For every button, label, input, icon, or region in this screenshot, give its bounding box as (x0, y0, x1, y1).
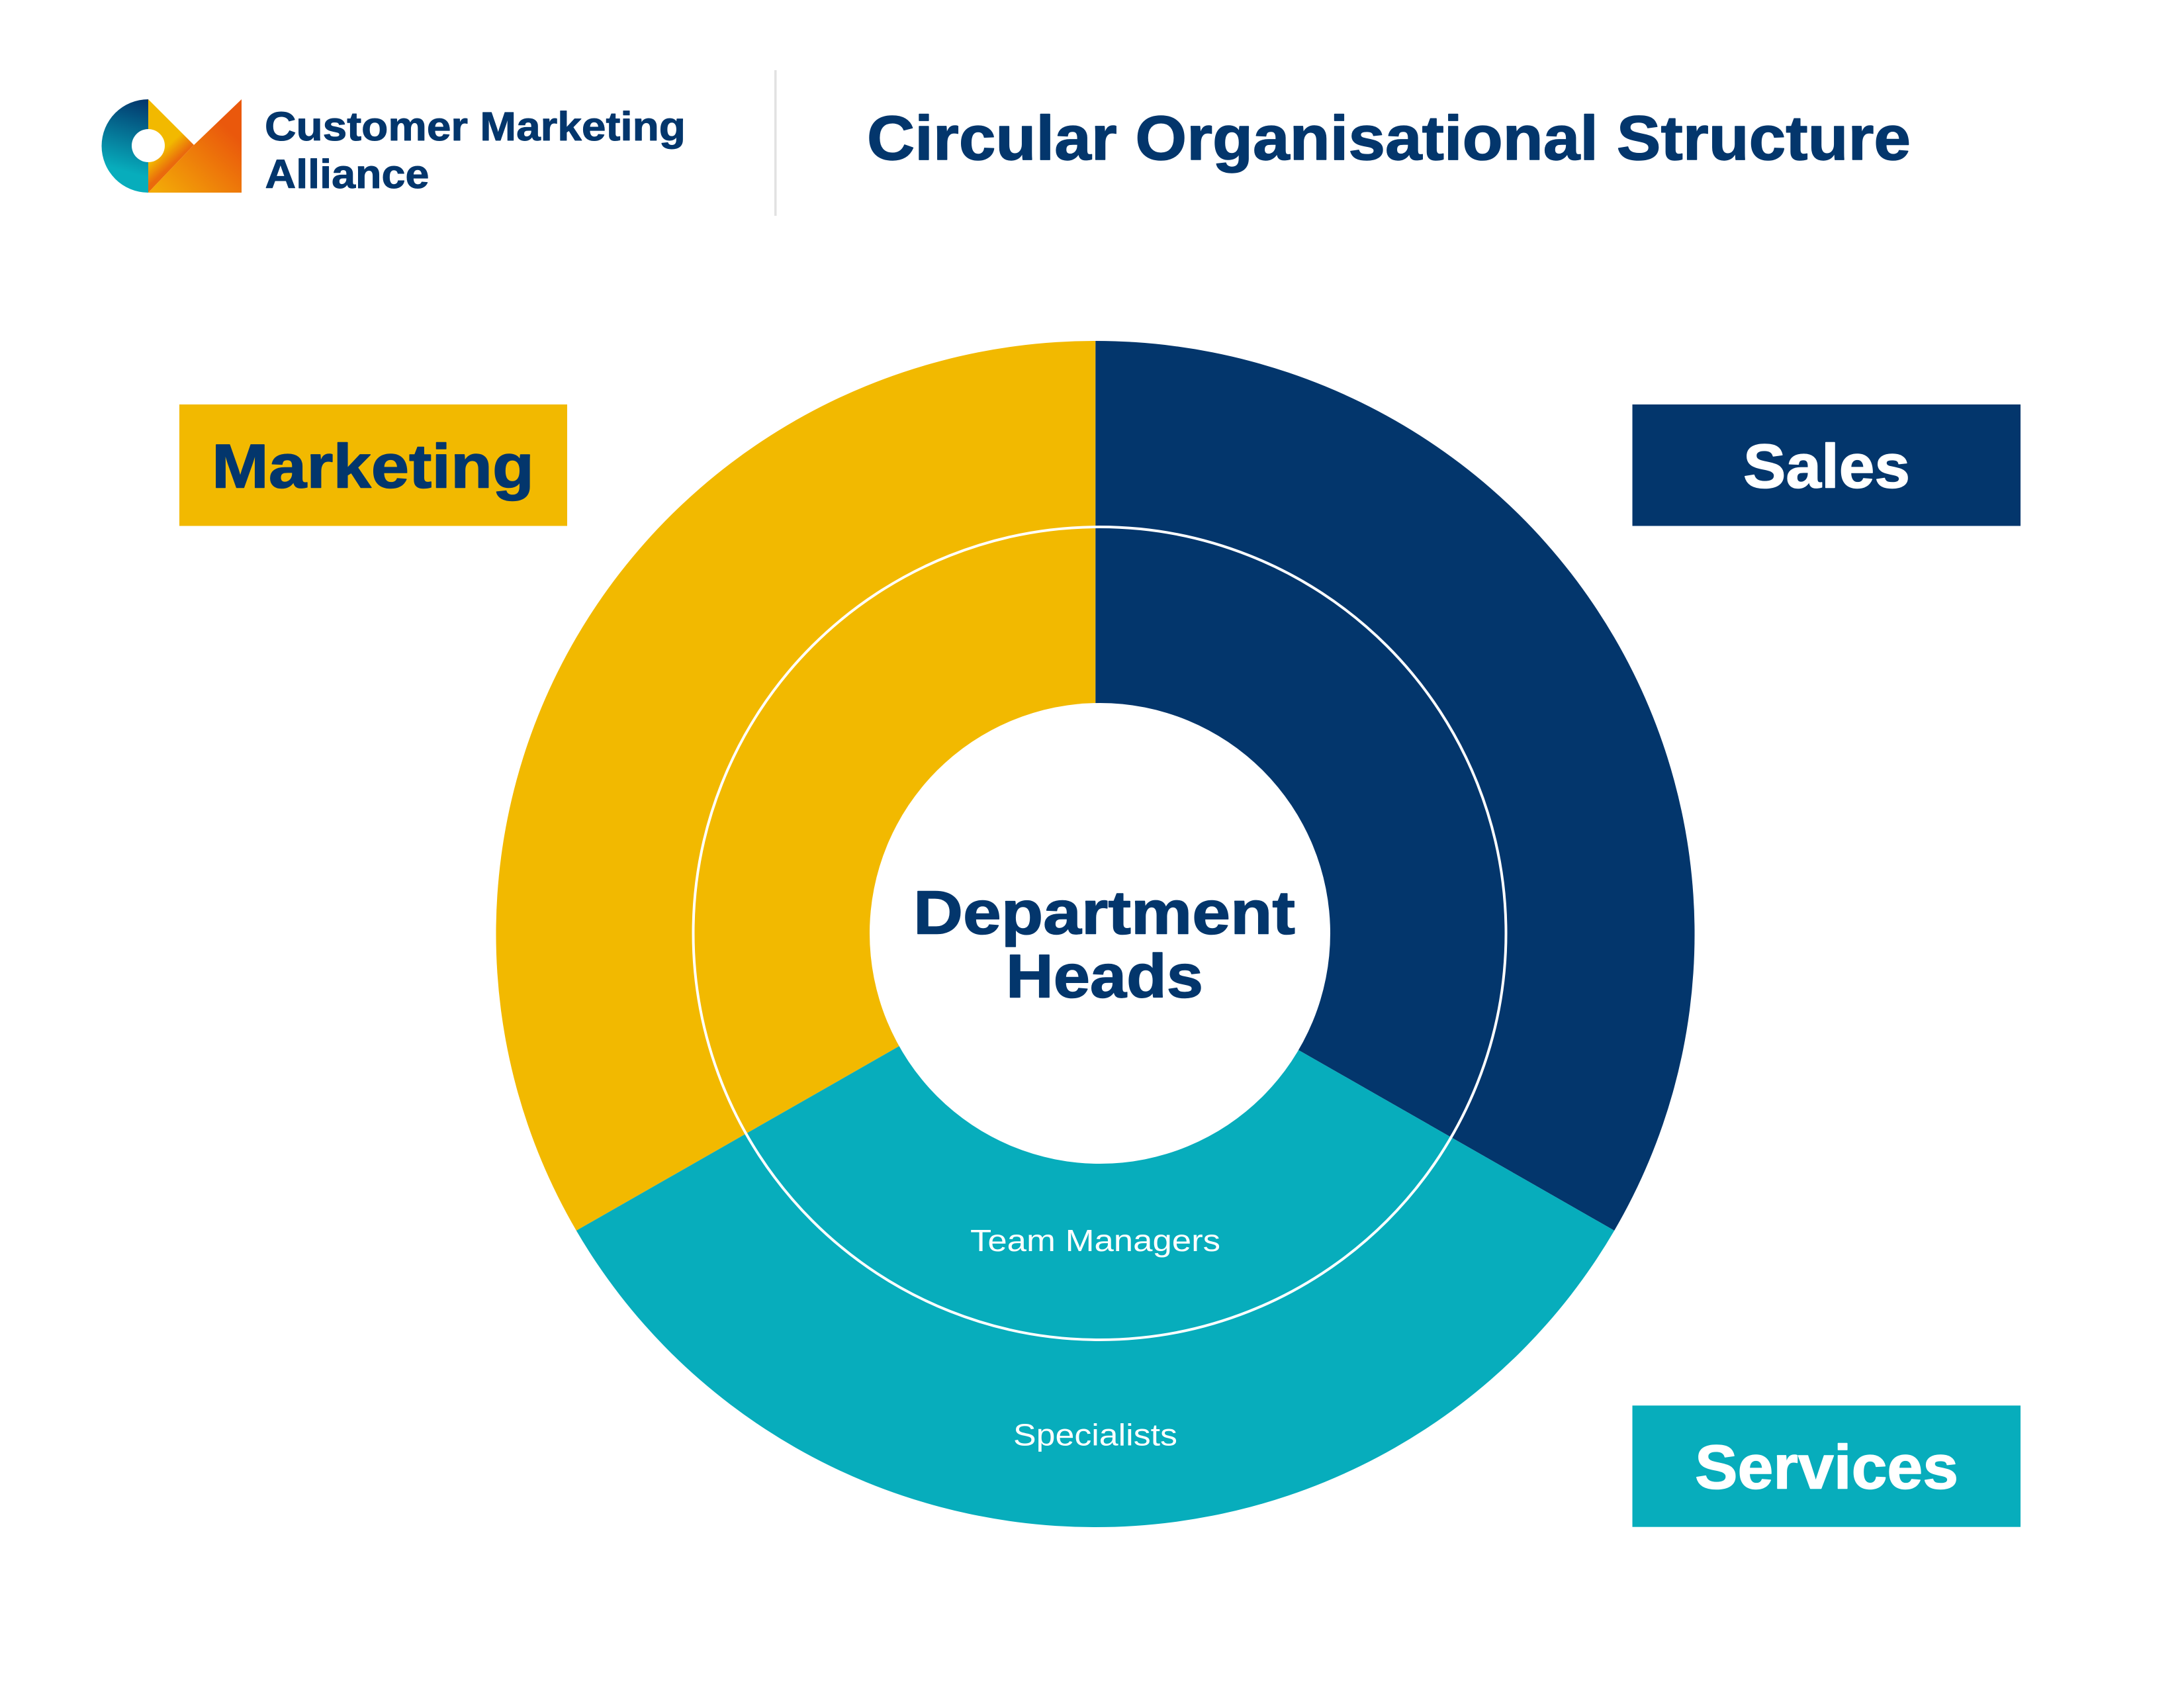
label: marketing: Marketing (212, 432, 534, 501)
brand name: Alliance (265, 152, 429, 197)
label: marketing (179, 404, 567, 526)
ring label: specialists: Specialists (1013, 1417, 1177, 1452)
ring: team managers boundary (694, 527, 1506, 1340)
header (102, 70, 1911, 216)
centre label: department heads: Department (913, 878, 1295, 947)
ring label: team managers: Team Managers (970, 1223, 1220, 1258)
segment: services (576, 934, 1614, 1527)
centre label: department heads: Heads (1006, 942, 1203, 1011)
centre label: department heads (913, 878, 1295, 1011)
segment: marketing (496, 341, 1095, 1231)
circular diagram (496, 341, 1695, 1527)
label: services (1632, 1405, 2021, 1527)
centre circle (870, 703, 1330, 1164)
brand name (265, 104, 686, 197)
label: sales: Sales (1743, 432, 1910, 501)
header divider (774, 70, 777, 216)
label: services: Services (1695, 1432, 1958, 1502)
label: sales (1632, 404, 2021, 526)
title: Circular Organisational Structure (867, 103, 1911, 173)
segment: sales (1095, 341, 1695, 1231)
icon: Customer Marketing Alliance logo (102, 99, 242, 193)
brand name: Customer Marketing (265, 104, 686, 150)
